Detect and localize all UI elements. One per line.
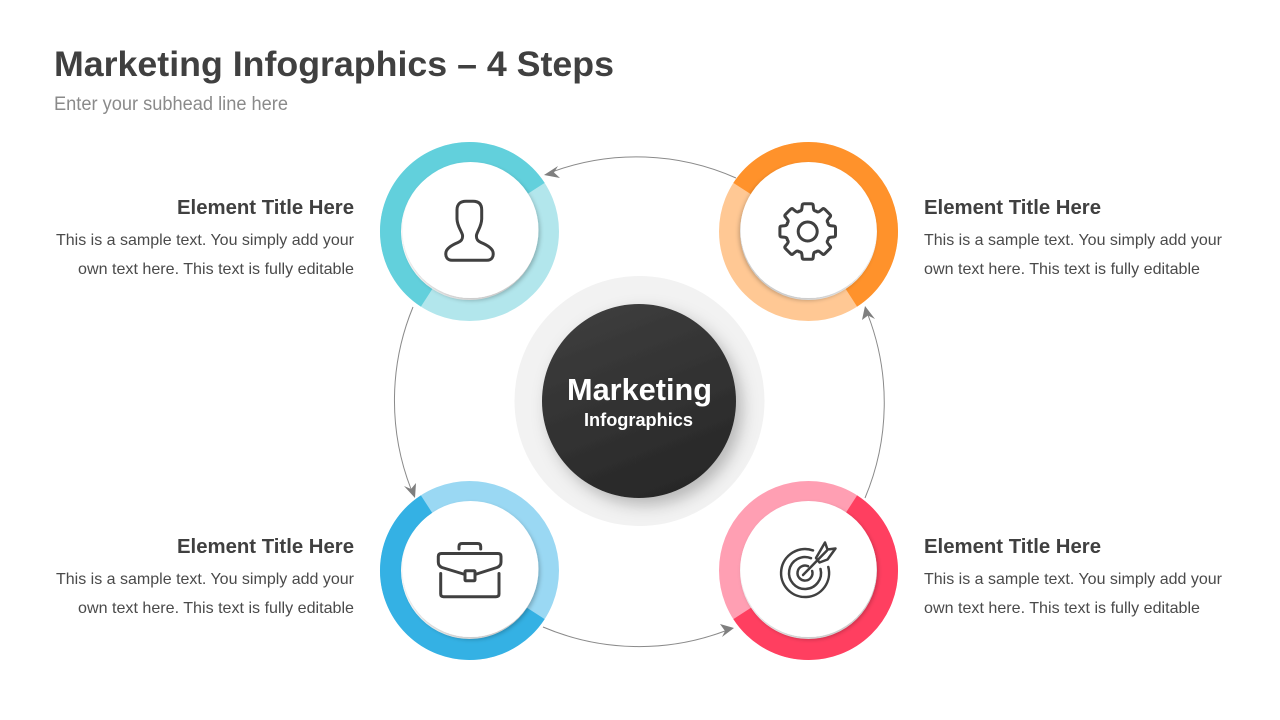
arrow: right, pink to orange: [862, 306, 884, 498]
text block: step 4: own text here. This text is fully editable: [924, 600, 1200, 617]
text block: step 4: This is a sample text. You simply add your: [924, 571, 1223, 588]
text block: step 1: own text here. This text is fully editable: [78, 261, 354, 278]
title: Marketing Infographics – 4 Steps: [54, 44, 614, 84]
text block: step 4: Element Title Here: [924, 536, 1101, 558]
text block: step 2: Element Title Here: [924, 197, 1101, 219]
text block: step 1: This is a sample text. You simply add your: [56, 232, 355, 249]
text block: step 4: [924, 536, 1223, 617]
center subheading: Infographics: [584, 410, 693, 430]
text block: step 2: This is a sample text. You simply add your: [924, 232, 1223, 249]
text block: step 3: This is a sample text. You simply add your: [56, 571, 355, 588]
center heading: Marketing: [567, 372, 712, 407]
subhead: Enter your subhead line here: [54, 94, 288, 115]
icon: gear: [780, 204, 836, 259]
arrow: top, orange to teal: [544, 157, 736, 178]
text block: step 1: [56, 197, 355, 278]
text block: step 3: [56, 536, 355, 617]
text block: step 1: Element Title Here: [177, 197, 354, 219]
arrow: left, teal to blue: [394, 307, 416, 498]
step 2: orange ring with gear icon: [730, 152, 888, 310]
icon: briefcase: [438, 544, 501, 597]
center hub: [514, 276, 764, 526]
icon: person: [446, 201, 493, 260]
text block: step 2: [924, 197, 1223, 278]
text block: step 3: own text here. This text is fully editable: [78, 600, 354, 617]
arrow: bottom, blue to pink: [543, 624, 734, 647]
step 1: teal ring with person icon: [390, 152, 548, 310]
text block: step 3: Element Title Here: [177, 536, 354, 558]
step 4: pink ring with target icon: [730, 492, 888, 650]
step 3: blue ring with briefcase icon: [390, 492, 548, 650]
text block: step 2: own text here. This text is fully editable: [924, 261, 1200, 278]
icon: target: [781, 542, 836, 597]
